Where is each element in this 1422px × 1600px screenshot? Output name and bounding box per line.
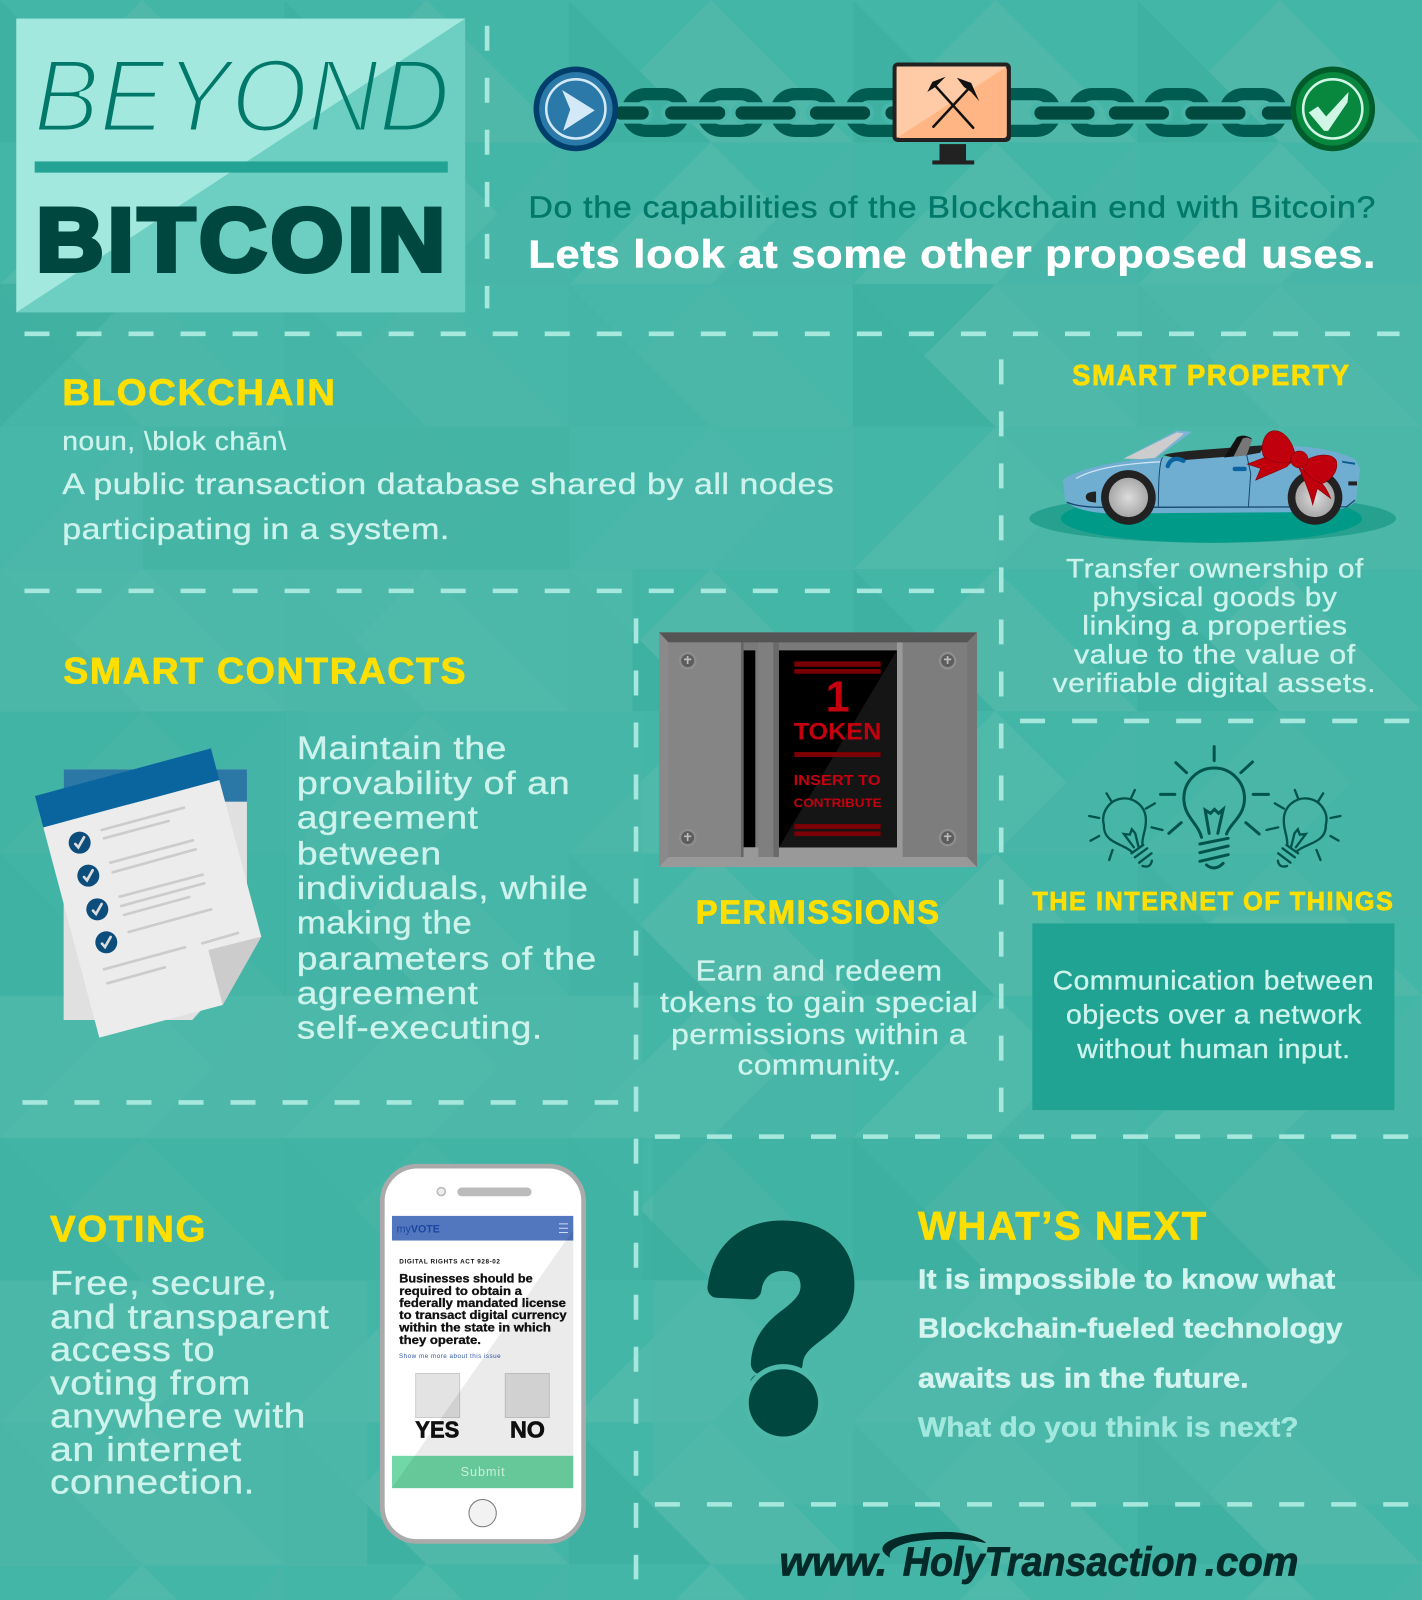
description: anywhere with: [50, 1397, 306, 1435]
heading: PERMISSIONS: [696, 894, 941, 931]
logo: HolyTransaction: www.: [779, 1538, 887, 1584]
definition text: participating in a system.: [62, 513, 450, 546]
panel: smart property: [1029, 360, 1396, 698]
description: self-executing.: [297, 1009, 543, 1046]
icon: phone voting screen: YES: [415, 1416, 459, 1442]
description: making the: [297, 904, 472, 941]
title: beyond: BEYOND: [34, 39, 450, 155]
icon: phone voting screen: they operate.: [399, 1334, 481, 1347]
icon: phone voting screen: NO: [510, 1416, 545, 1442]
icon: phone voting screen: myVOTE: [397, 1224, 440, 1236]
icon: mining monitor: [893, 62, 1011, 164]
description: agreement: [297, 974, 478, 1011]
description: provability of an: [297, 764, 570, 801]
intro question: Do the capabilities of the Blockchain end with Bitcoin?: [528, 191, 1376, 225]
title rule: [35, 161, 448, 173]
description: [918, 1264, 1343, 1394]
heading: SMART PROPERTY: [1072, 360, 1351, 392]
heading: SMART CONTRACTS: [63, 651, 467, 692]
chain links: [612, 94, 1306, 131]
panel: voting: [50, 1166, 584, 1541]
icon: token slot machine: INSERT TO: [794, 772, 881, 789]
panel: internet of things: [1032, 747, 1394, 1110]
logo: HolyTransaction: [779, 1532, 1299, 1584]
icon: contract document: [35, 748, 261, 1038]
description: between: [297, 834, 442, 871]
logo: HolyTransaction: HolyTransaction: [903, 1538, 1198, 1584]
heading: THE INTERNET OF THINGS: [1032, 888, 1394, 916]
description box: objects over a network: [1066, 999, 1362, 1029]
icon: phone voting screen: within the state in which: [398, 1322, 551, 1335]
description box: [1032, 923, 1394, 1110]
heading: VOTING: [50, 1209, 207, 1250]
description: linking a properties: [1082, 611, 1348, 641]
panel: what's next: [705, 1175, 1343, 1478]
icon: phone voting screen: required to obtain a: [399, 1285, 523, 1298]
description: awaits us in the future.: [918, 1363, 1249, 1394]
icon: car with bow: [1029, 431, 1396, 543]
icon: phone voting screen: [382, 1166, 584, 1541]
title panel: [16, 19, 465, 312]
icon: end check mark: [1290, 67, 1375, 151]
description: Free, secure,: [50, 1265, 277, 1303]
description: an internet: [50, 1431, 242, 1469]
icon: phone voting screen: DIGITAL RIGHTS ACT 928-02: [399, 1259, 500, 1266]
icon: light bulbs: [1089, 747, 1340, 868]
definition text: [62, 468, 834, 546]
icon: token slot machine: [659, 632, 977, 867]
title: bitcoin: BITCOIN: [36, 191, 449, 290]
icon: start play button: [534, 67, 618, 151]
description: individuals, while: [297, 869, 589, 906]
intro statement: Lets look at some other proposed uses.: [528, 234, 1376, 277]
pronunciation: noun, \blok chān\: [62, 428, 287, 456]
description: agreement: [297, 799, 478, 836]
icon: phone voting screen: Businesses should be: [399, 1273, 533, 1286]
description: Blockchain-fueled technology: [918, 1313, 1343, 1344]
logo: HolyTransaction: .com: [1205, 1538, 1299, 1584]
description: access to: [50, 1331, 215, 1369]
icon: token slot machine: CONTRIBUTE: [794, 796, 882, 810]
description: parameters of the: [297, 939, 597, 976]
description: [50, 1265, 329, 1502]
icon: phone voting screen: Submit: [461, 1465, 505, 1479]
description: [660, 956, 978, 1081]
icon: token slot machine: TOKEN: [794, 718, 881, 745]
description: Maintain the: [297, 729, 507, 766]
icon: question mark: ?: [705, 1175, 859, 1478]
icon: phone voting screen: Show me more about this issue: [399, 1353, 501, 1360]
call to action: What do you think is next?: [918, 1412, 1299, 1443]
description: voting from: [50, 1365, 251, 1403]
definition text: A public transaction database shared by all nodes: [62, 468, 834, 501]
description: tokens to gain special: [660, 987, 978, 1019]
description: connection.: [50, 1464, 255, 1502]
heading: WHAT’S NEXT: [918, 1205, 1208, 1249]
description box: without human input.: [1076, 1034, 1351, 1064]
description: physical goods by: [1093, 582, 1338, 612]
description: Transfer ownership of: [1066, 554, 1364, 584]
description: community.: [738, 1049, 902, 1081]
panel: smart contracts: [35, 651, 597, 1046]
icon: phone voting screen: federally mandated license: [399, 1297, 567, 1310]
description box: Communication between: [1053, 966, 1374, 996]
icon: phone voting screen: to transact digital currency: [399, 1309, 567, 1322]
description: [1053, 554, 1376, 698]
icon: token slot machine: 1: [826, 674, 850, 722]
description: verifiable digital assets.: [1053, 668, 1376, 698]
description: It is impossible to know what: [918, 1264, 1335, 1295]
description: and transparent: [50, 1298, 329, 1336]
description: permissions within a: [671, 1019, 967, 1051]
blockchain chain graphic: [534, 62, 1375, 164]
description: [297, 729, 597, 1046]
heading: BLOCKCHAIN: [62, 372, 337, 413]
description: Earn and redeem: [696, 956, 943, 988]
panel: permissions: [659, 632, 978, 1081]
description: value to the value of: [1074, 639, 1356, 669]
panel: blockchain definition: [62, 372, 834, 546]
